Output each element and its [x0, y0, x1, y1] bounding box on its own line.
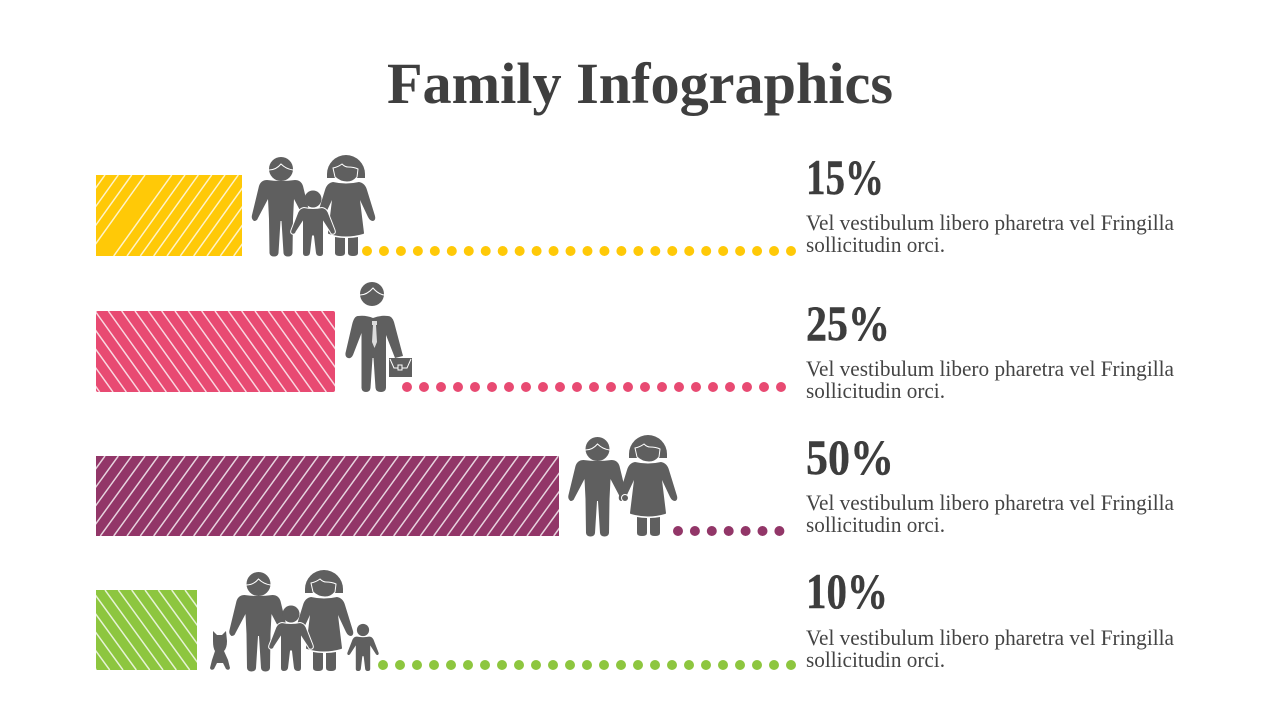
- description: row 4: Vel vestibulum libero pharetra vel Fringilla: [806, 625, 1174, 650]
- bar: green hatched: [96, 590, 197, 670]
- bar: pink hatched: [96, 311, 335, 392]
- dotted line: green: [383, 660, 792, 670]
- dotted line: yellow: [367, 246, 792, 256]
- description: row 4: sollicitudin orci.: [806, 647, 945, 672]
- description: row 1: Vel vestibulum libero pharetra vel Fringilla: [806, 210, 1174, 235]
- row 4: 10 percent: [96, 570, 1174, 672]
- row 1: 15 percent: [96, 155, 1174, 256]
- description: row 2: sollicitudin orci.: [806, 378, 945, 403]
- icon: businessman with briefcase: [345, 282, 412, 392]
- description: row 3: sollicitudin orci.: [806, 512, 945, 537]
- percentage: 15%: 15%: [806, 149, 884, 205]
- percentage: 50%: 50%: [806, 429, 894, 485]
- description: row 1: sollicitudin orci.: [806, 232, 945, 257]
- percentage: 25%: 25%: [806, 295, 890, 351]
- dotted line: pink: [407, 382, 782, 392]
- icon: family of three: [252, 155, 375, 256]
- row 2: 25 percent: [42, 282, 1174, 403]
- title: Family Infographics: [387, 51, 893, 116]
- icon: family with two children and a dog: [210, 570, 379, 672]
- description: row 2: Vel vestibulum libero pharetra vel Fringilla: [806, 356, 1174, 381]
- percentage: 10%: 10%: [806, 563, 888, 619]
- dotted line: purple: [678, 526, 780, 536]
- row 3: 50 percent: [96, 435, 1174, 536]
- bar: yellow hatched: [96, 175, 242, 256]
- description: row 3: Vel vestibulum libero pharetra vel Fringilla: [806, 490, 1174, 515]
- bar: purple hatched: [96, 456, 559, 536]
- icon: couple holding hands: [568, 435, 677, 536]
